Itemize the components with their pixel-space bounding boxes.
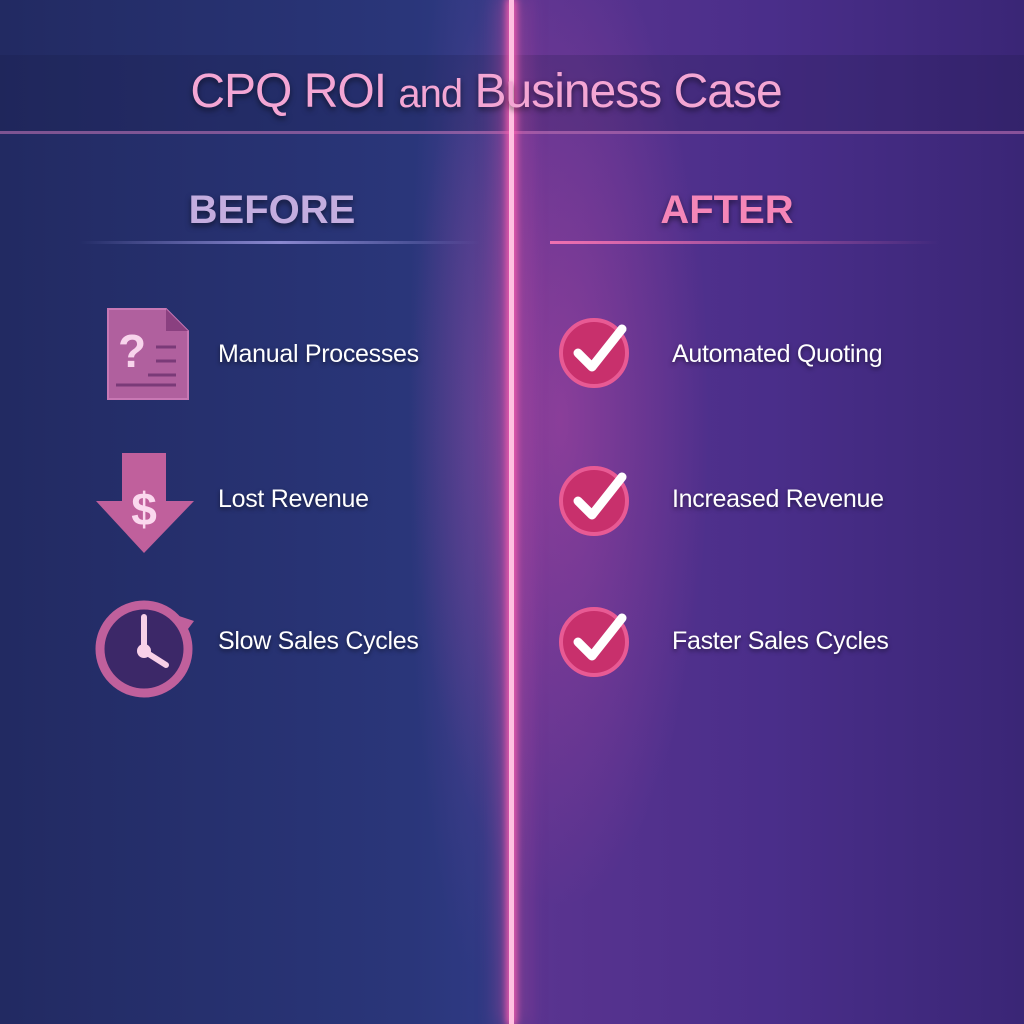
- text: manual processes: Manual Processes: [218, 340, 419, 368]
- panel: before items: [96, 308, 420, 698]
- title: CPQ ROI and Business Case: [190, 65, 782, 118]
- icon: document question: ?: [118, 325, 146, 377]
- heading: before: BEFORE: [189, 188, 355, 232]
- text: faster sales cycles: Faster Sales Cycles: [672, 627, 889, 655]
- title band: [0, 55, 1024, 134]
- text: increased revenue: Increased Revenue: [672, 485, 884, 513]
- panel: after items: [559, 318, 890, 677]
- icon: check 2: [559, 466, 629, 536]
- icon: document question: [107, 308, 189, 400]
- text: lost revenue: Lost Revenue: [218, 485, 369, 513]
- icon: check 1: [559, 318, 629, 388]
- text: slow sales cycles: Slow Sales Cycles: [218, 627, 419, 655]
- icon: down arrow dollar: [96, 453, 194, 553]
- text: automated quoting: Automated Quoting: [672, 340, 882, 368]
- icon: down arrow dollar: $: [131, 483, 157, 535]
- heading: after: AFTER: [660, 188, 794, 232]
- glowing divider line: [509, 0, 514, 1024]
- icon: clock: [96, 600, 194, 698]
- icon: check 3: [559, 607, 629, 677]
